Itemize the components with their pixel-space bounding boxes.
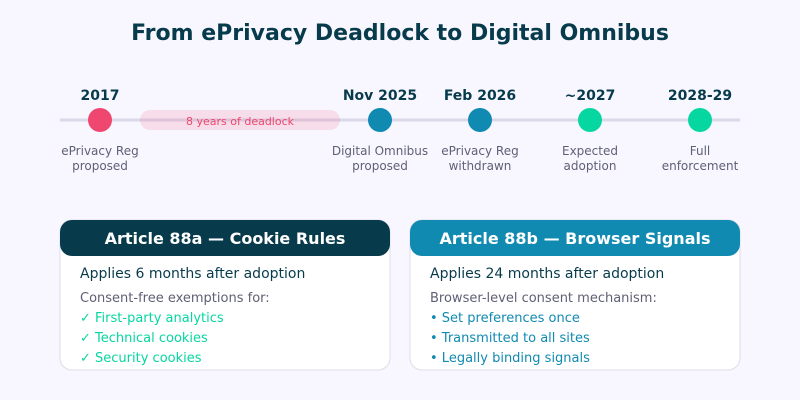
panel header: Article 88b: Article 88b — Browser Signals (439, 229, 711, 248)
milestone: Nov 2025: proposed (352, 159, 408, 173)
milestone: Feb 2026 (441, 88, 519, 173)
milestone: ~2027: Expected (562, 144, 618, 158)
milestone: Feb 2026: Feb 2026 (444, 88, 516, 104)
panel: Article 88b (410, 220, 740, 370)
milestone: 2017: proposed (72, 159, 128, 173)
mechanism list: • Set preferences once (430, 311, 580, 326)
mechanism list (430, 311, 590, 366)
timing text: Applies 6 months after adoption (80, 266, 305, 282)
mechanism list: • Transmitted to all sites (430, 331, 590, 346)
panel header: Article 88a (60, 220, 390, 256)
milestone: 2017: ePrivacy Reg (61, 144, 139, 158)
milestone: ~2027: adoption (564, 159, 616, 173)
exemptions list: ✓ Security cookies (80, 351, 202, 366)
deadlock span: 8 years of deadlock (186, 115, 295, 128)
subheading: Browser-level consent mechanism: (430, 291, 657, 306)
milestone: ~2027: ~2027 (565, 88, 615, 104)
deadlock span (140, 110, 340, 130)
panel header: Article 88b (410, 220, 740, 256)
timing text: Applies 24 months after adoption (430, 266, 664, 282)
panel: Article 88a (60, 220, 390, 370)
milestone: 2028-29: 2028-29 (668, 88, 732, 104)
milestone: 2017: 2017 (81, 88, 119, 104)
exemptions list (80, 311, 224, 366)
milestone: 2028-29: Full (690, 144, 710, 158)
timeline (60, 88, 740, 173)
milestone: 2017 (61, 88, 139, 173)
milestone: ~2027 (562, 88, 618, 173)
mechanism list: • Legally binding signals (430, 351, 590, 366)
milestone: Nov 2025: Nov 2025 (343, 88, 417, 104)
milestone: Nov 2025 (332, 88, 428, 173)
milestone: Feb 2026: withdrawn (449, 159, 511, 173)
exemptions list: ✓ First-party analytics (80, 311, 224, 326)
panel header: Article 88a: Article 88a — Cookie Rules (105, 229, 345, 248)
title: From ePrivacy Deadlock to Digital Omnibus (131, 21, 669, 46)
milestone: 2028-29 (662, 88, 739, 173)
milestone: Feb 2026: ePrivacy Reg (441, 144, 519, 158)
milestone: Nov 2025: Digital Omnibus (332, 144, 428, 158)
subheading: Consent-free exemptions for: (80, 291, 270, 306)
milestone: 2028-29: enforcement (662, 159, 739, 173)
exemptions list: ✓ Technical cookies (80, 331, 208, 346)
